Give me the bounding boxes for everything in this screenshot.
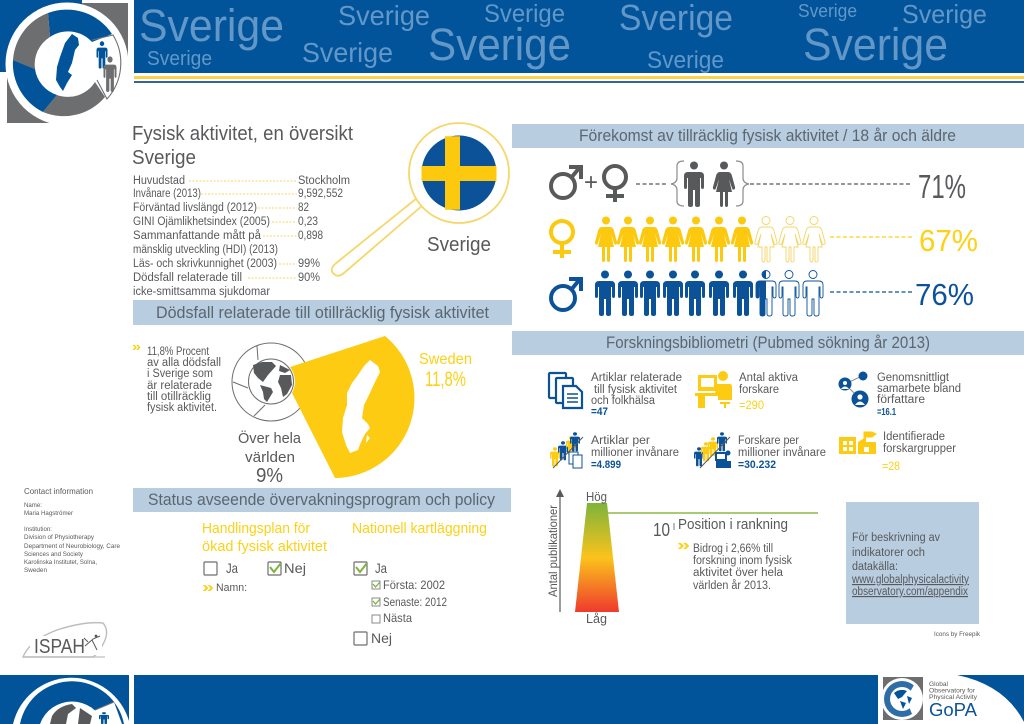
donut with globe — [232, 343, 310, 421]
row: men 76% — [551, 270, 974, 316]
header banner: Sverige — [428, 19, 571, 70]
section header: deaths: Dödsfall relaterade till otillräcklig fysisk aktivitet — [156, 303, 489, 322]
stat: research groups: forskargrupper — [883, 443, 956, 455]
footer logo left — [0, 675, 129, 724]
stat: active researchers: Antal aktiva — [739, 372, 799, 384]
heading: overview: Sverige — [132, 147, 196, 169]
label: worldwide 9% — [238, 429, 302, 487]
stat: author collaboration: Genomsnittligt — [877, 372, 950, 384]
deaths description: 11,8% Procent — [147, 346, 210, 358]
contact information: Division of Physiotherapy — [24, 534, 95, 541]
ranking position: forskning inom fysisk — [693, 555, 792, 567]
header banner: Sverige — [139, 0, 284, 51]
header banner: Sverige — [798, 1, 857, 21]
country facts list: Huvudstad — [133, 175, 185, 187]
row: both sexes 71% — [551, 161, 966, 207]
ranking position — [653, 516, 792, 592]
ranking position: » — [677, 537, 690, 554]
row: women 67% — [551, 216, 978, 262]
panel: national survey: Första: 2002 — [383, 578, 445, 592]
info box: indicators: indikatorer och — [852, 547, 925, 559]
row: both sexes 71%: + — [584, 169, 598, 196]
contact information — [24, 486, 120, 574]
contact information: Name: — [24, 502, 42, 509]
stat: active researchers: forskare — [739, 384, 779, 396]
stat: articles: och folkhälsa — [591, 395, 656, 407]
row: women 67%: 67% — [919, 223, 978, 258]
footer logo GoPA: GoPA — [929, 700, 977, 720]
publication ranking chart: Antal publikationer — [546, 505, 560, 597]
deaths description: fysisk aktivitet. — [147, 402, 217, 414]
stat: active researchers — [695, 371, 799, 412]
ranking position: Position i rankning — [678, 516, 788, 533]
footer logo GoPA: Observatory for — [929, 688, 976, 694]
country facts list: icke-smittsamma sjukdomar — [133, 286, 270, 298]
info box: indicators: observatory.com/appendix — [852, 586, 968, 598]
stat: research groups — [839, 431, 956, 473]
ranking position: världen år 2013. — [693, 580, 771, 592]
stat: research groups: =28 — [882, 461, 900, 473]
info box: indicators: För beskrivning av — [852, 532, 940, 544]
country facts list: Sammanfattande mått på — [133, 230, 262, 242]
ranking position: Bidrog i 2,66% till — [693, 543, 773, 555]
panel: action plan: » — [202, 579, 214, 596]
footer logo GoPA: Physical Activity — [929, 694, 978, 701]
country facts list: 99% — [298, 258, 320, 270]
country facts list: Läs- och skrivkunnighet (2003) — [133, 258, 277, 270]
country facts list: Invånare (2013) — [133, 188, 201, 200]
header banner: Sverige — [338, 0, 430, 31]
label: Sweden 11,8%: 11,8% — [425, 368, 466, 391]
section header: prevalence — [512, 124, 1024, 148]
row: men 76%: 76% — [915, 277, 974, 312]
section header: prevalence: Förekomst av tillräcklig fysisk aktivitet / 18 år och äldre — [579, 126, 956, 145]
panel: national survey: Nationell kartläggning — [352, 520, 487, 537]
section header: monitoring status: Status avseende övervakningsprogram och policy — [148, 490, 495, 509]
country facts list: mänsklig utveckling (HDI) (2013) — [133, 244, 278, 256]
ISPAH logo — [23, 623, 107, 658]
stat: articles: till fysisk aktivitet — [594, 384, 678, 396]
header banner: Sverige — [803, 19, 948, 70]
section header: bibliometrics: Forskningsbibliometri (Pubmed sökning år 2013) — [606, 333, 930, 352]
deaths description: till otillräcklig — [147, 391, 211, 403]
stat: author collaboration: samarbete bland — [877, 383, 961, 395]
country facts list: Förväntad livslängd (2012) — [133, 202, 257, 214]
stat: researchers per million: Forskare per — [738, 435, 799, 447]
stat: author collaboration — [838, 372, 961, 418]
footer logo GoPA: Global — [929, 681, 948, 688]
info box: indicators — [846, 502, 979, 624]
label: Sweden 11,8%: Sweden — [419, 351, 472, 368]
yellow sector: Sweden — [290, 336, 414, 478]
contact information: Sweden — [24, 567, 47, 574]
header banner: Sverige — [302, 37, 393, 68]
label: worldwide 9%: 9% — [256, 465, 283, 487]
panel: national survey: Nej — [371, 630, 392, 646]
ranking position: 10 — [653, 520, 670, 540]
header banner: Sverige — [147, 48, 212, 70]
stat: articles per million: Artiklar per — [591, 435, 650, 447]
info box: indicators: datakälla: — [852, 561, 898, 573]
country facts list: 82 — [298, 202, 309, 214]
panel: national survey: Nästa — [383, 611, 412, 625]
stat: articles — [549, 372, 682, 418]
icon credit: Icons by Freepik — [934, 631, 981, 638]
panel: action plan: Namn: — [216, 582, 247, 594]
stat: research groups: Identifierade — [883, 431, 945, 443]
publication ranking chart: Hög — [586, 490, 607, 504]
footer logo GoPA — [881, 677, 978, 720]
stat: researchers per million — [694, 432, 826, 471]
label: worldwide 9%: Över hela — [238, 429, 302, 447]
info box: indicators: www.globalphysicalactivity — [851, 574, 969, 586]
stat: articles: =47 — [591, 406, 608, 418]
deaths description: » — [132, 339, 141, 354]
panel: action plan: Ja — [226, 560, 238, 576]
panel: national survey: Ja — [375, 560, 387, 576]
contact information: Institution: — [24, 526, 52, 533]
stat: articles: Artiklar relaterade — [591, 372, 682, 384]
section header: bibliometrics — [512, 331, 1024, 355]
stat: researchers per million: millioner invånare — [738, 447, 826, 459]
header banner — [134, 0, 1024, 83]
header banner: Sverige — [484, 0, 565, 28]
country facts list: 9,592,552 — [298, 188, 343, 200]
country facts list: 0,898 — [298, 230, 323, 242]
stat: articles per million: millioner invånare — [591, 447, 679, 459]
contact information: Department of Neurobiology, Care — [24, 543, 120, 550]
deaths description: av alla dödsfall — [147, 357, 221, 369]
country facts list: 0,23 — [298, 216, 318, 228]
ISPAH logo: ISPAH — [34, 636, 85, 658]
heading: overview — [132, 123, 353, 169]
stat: active researchers: =290 — [739, 400, 764, 412]
panel: action plan — [202, 520, 328, 596]
stat: author collaboration: =16.1 — [877, 407, 896, 418]
label: worldwide 9%: världen — [245, 449, 295, 466]
panel: action plan: Handlingsplan för — [202, 520, 310, 537]
header banner: Sverige — [647, 47, 724, 74]
country facts list: Stockholm — [298, 175, 350, 187]
publication ranking chart: Låg — [586, 612, 607, 626]
stat: articles per million — [550, 432, 679, 471]
contact information: Maria Hagströmer — [24, 510, 74, 517]
deaths description — [132, 339, 221, 414]
country facts list: GINI Ojämlikhetsindex (2005) — [133, 216, 270, 228]
magnifier with Swedish flag: Sverige — [427, 234, 491, 256]
deaths description: i Sverige som — [147, 368, 213, 380]
panel: national survey — [352, 520, 487, 646]
publication ranking chart — [546, 489, 818, 626]
country facts list — [133, 175, 350, 298]
contact information: Sciences and Society — [24, 551, 84, 558]
label: Sweden 11,8% — [419, 351, 472, 391]
row: both sexes 71%: 71% — [918, 168, 966, 205]
stat: author collaboration: författare — [877, 394, 925, 406]
deaths description: är relaterade — [147, 380, 212, 392]
country facts list: Dödsfall relaterade till — [133, 272, 242, 284]
contact information: Contact information — [24, 486, 93, 496]
heading: overview: Fysisk aktivitet, en översikt — [132, 123, 353, 145]
map of Sweden white — [342, 360, 380, 453]
panel: action plan: Nej — [284, 560, 306, 576]
logo: Sweden runners — [0, 0, 128, 126]
magnifier with Swedish flag — [332, 123, 509, 276]
panel: action plan: ökad fysisk aktivitet — [202, 538, 328, 555]
footer band — [134, 675, 1024, 724]
ranking position: aktivitet över hela — [693, 567, 784, 579]
stat: researchers per million: =30.232 — [738, 459, 776, 471]
contact information: Karolinska Institutet, Solna, — [24, 559, 97, 566]
country facts list: 90% — [298, 272, 320, 284]
stat: articles per million: =4.899 — [591, 459, 621, 471]
panel: national survey: Senaste: 2012 — [383, 595, 447, 609]
